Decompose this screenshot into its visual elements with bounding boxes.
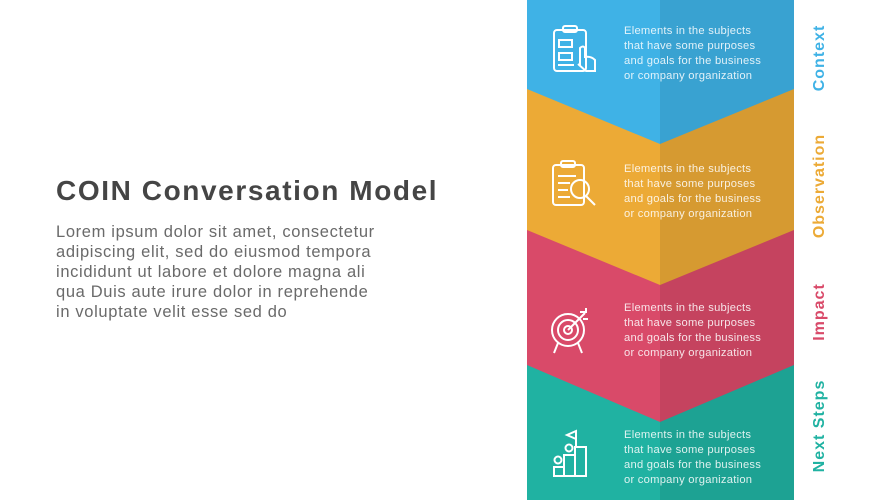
paragraph: in voluptate velit esse sed do — [56, 303, 287, 321]
text: impact: Elements in the subjects — [624, 302, 751, 314]
icon: clipboard hand — [554, 26, 595, 71]
paragraph: qua Duis aute irure dolor in reprehende — [56, 283, 368, 301]
text: next steps — [624, 429, 761, 486]
label: Next Steps: Next Steps — [811, 380, 828, 472]
paragraph: Lorem ipsum dolor sit amet, consectetur — [56, 223, 375, 241]
paragraph: incididunt ut labore et dolore magna ali — [56, 263, 365, 281]
text: context: and goals for the business — [624, 55, 761, 67]
text: context: Elements in the subjects — [624, 25, 751, 37]
text: next steps: or company organization — [624, 474, 752, 486]
paragraph: adipiscing elit, sed do eiusmod tempora — [56, 243, 371, 261]
text: observation: or company organization — [624, 208, 752, 220]
text: observation: and goals for the business — [624, 193, 761, 205]
text: next steps: and goals for the business — [624, 459, 761, 471]
text: impact: that have some purposes — [624, 317, 755, 329]
text: impact: and goals for the business — [624, 332, 761, 344]
segment: teal — [527, 0, 794, 500]
segment: red — [527, 0, 794, 422]
text: observation: that have some purposes — [624, 178, 755, 190]
segment: orange — [527, 0, 794, 285]
icon: steps flag — [554, 431, 586, 476]
text: context: or company organization — [624, 70, 752, 82]
text: next steps: that have some purposes — [624, 444, 755, 456]
text: context — [624, 25, 761, 82]
icon: target — [552, 308, 588, 353]
text: context: that have some purposes — [624, 40, 755, 52]
label: Observation: Observation — [811, 134, 828, 238]
text: observation: Elements in the subjects — [624, 163, 751, 175]
paragraph — [56, 223, 375, 321]
text: impact — [624, 302, 761, 359]
icon: clipboard magnifier — [553, 161, 595, 205]
label: Context: Context — [811, 25, 828, 91]
title: COIN Conversation Model — [56, 175, 438, 206]
text: next steps: Elements in the subjects — [624, 429, 751, 441]
text: observation — [624, 163, 761, 220]
segment: blue — [527, 0, 794, 144]
label: Impact: Impact — [811, 283, 828, 341]
text: impact: or company organization — [624, 347, 752, 359]
